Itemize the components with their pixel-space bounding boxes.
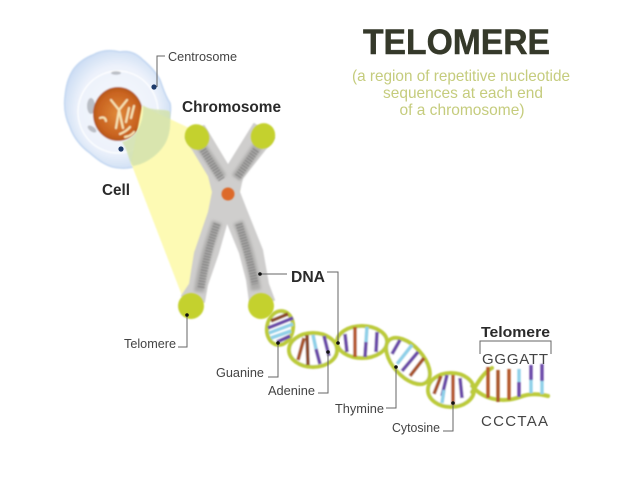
zoom cone <box>131 106 240 306</box>
centrosome dots <box>118 84 157 152</box>
small chromosomes in nucleus <box>100 100 134 137</box>
leader dots <box>185 272 455 405</box>
label: Adenine: Adenine <box>268 384 315 398</box>
organelles <box>86 71 121 134</box>
cell overlap tint <box>122 105 170 166</box>
sequence: CCCTAA: CCCTAA <box>481 413 548 430</box>
helix strands <box>264 309 474 407</box>
label: DNA: DNA <box>291 269 325 286</box>
telomere tail strands <box>472 368 548 400</box>
leader lines <box>157 56 551 431</box>
inner membrane ring <box>78 71 158 153</box>
telomere caps <box>175 119 279 323</box>
centromere <box>222 188 234 200</box>
telomere overhang bars <box>488 364 542 402</box>
label: Thymine: Thymine <box>335 402 384 416</box>
label: Telomere left: Telomere <box>124 337 176 351</box>
chromatin shading <box>199 146 258 292</box>
title: TELOMERE <box>363 23 550 62</box>
subtitle: (a region of repetitive nucleotide <box>352 68 570 85</box>
nucleus <box>93 87 143 141</box>
label: Centrosome: Centrosome <box>168 49 237 64</box>
subtitle: of a chromosome) <box>400 102 524 119</box>
subtitle: sequences at each end <box>383 85 543 102</box>
label: Telomere right: Telomere <box>481 324 550 341</box>
label: Chromosome: Chromosome <box>182 99 281 116</box>
label: Guanine: Guanine <box>216 366 264 380</box>
sequence: GGGATT: GGGATT <box>482 351 548 368</box>
cell body <box>65 51 171 168</box>
panel: cell <box>65 51 171 168</box>
label: Cytosine: Cytosine <box>392 421 440 435</box>
base pairs <box>268 314 462 405</box>
subtitle <box>352 68 570 119</box>
DNA helix <box>264 309 548 407</box>
chromatin texture <box>201 150 256 288</box>
chromosome body <box>182 124 274 302</box>
chromosome <box>175 119 279 323</box>
label: Cell: Cell <box>102 182 130 199</box>
